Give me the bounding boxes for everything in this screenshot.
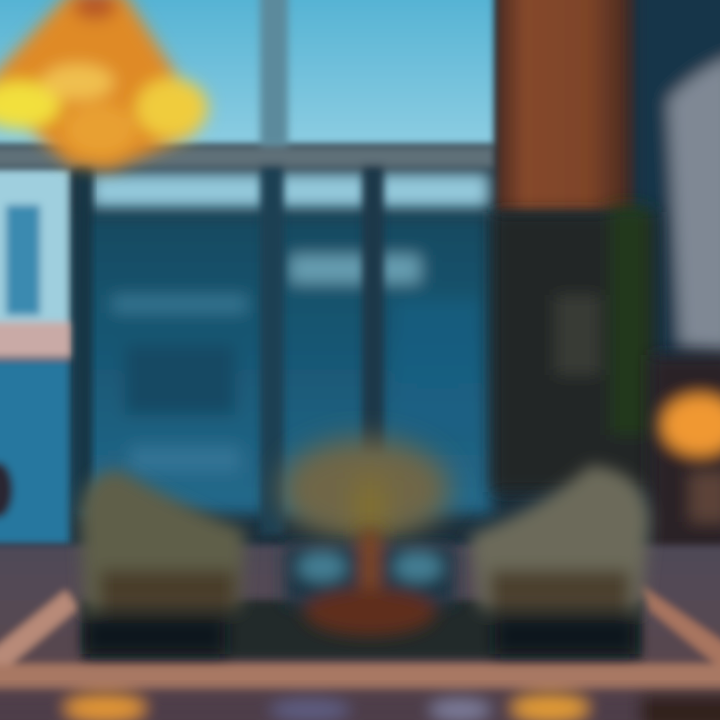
sea: [80, 214, 492, 514]
centre table with plant: [280, 438, 455, 636]
horizon strip: [90, 172, 490, 210]
window frame: [0, 0, 495, 535]
right wall: [635, 0, 720, 375]
curtain: [497, 0, 637, 212]
table base: [285, 530, 455, 636]
dark plant and lower curtain: [492, 205, 657, 492]
floor lamp: [0, 0, 208, 510]
floor: [0, 545, 720, 720]
table lamp right: [650, 355, 720, 585]
floor pattern strip: [0, 692, 720, 720]
lamp shade: [0, 0, 208, 170]
window sky: [0, 0, 495, 145]
rug: [82, 600, 642, 658]
left window panel: [0, 168, 72, 545]
left armchair: [80, 470, 245, 654]
lamp pole: [76, 165, 92, 510]
plant foliage: [280, 438, 450, 542]
right armchair: [470, 465, 650, 654]
